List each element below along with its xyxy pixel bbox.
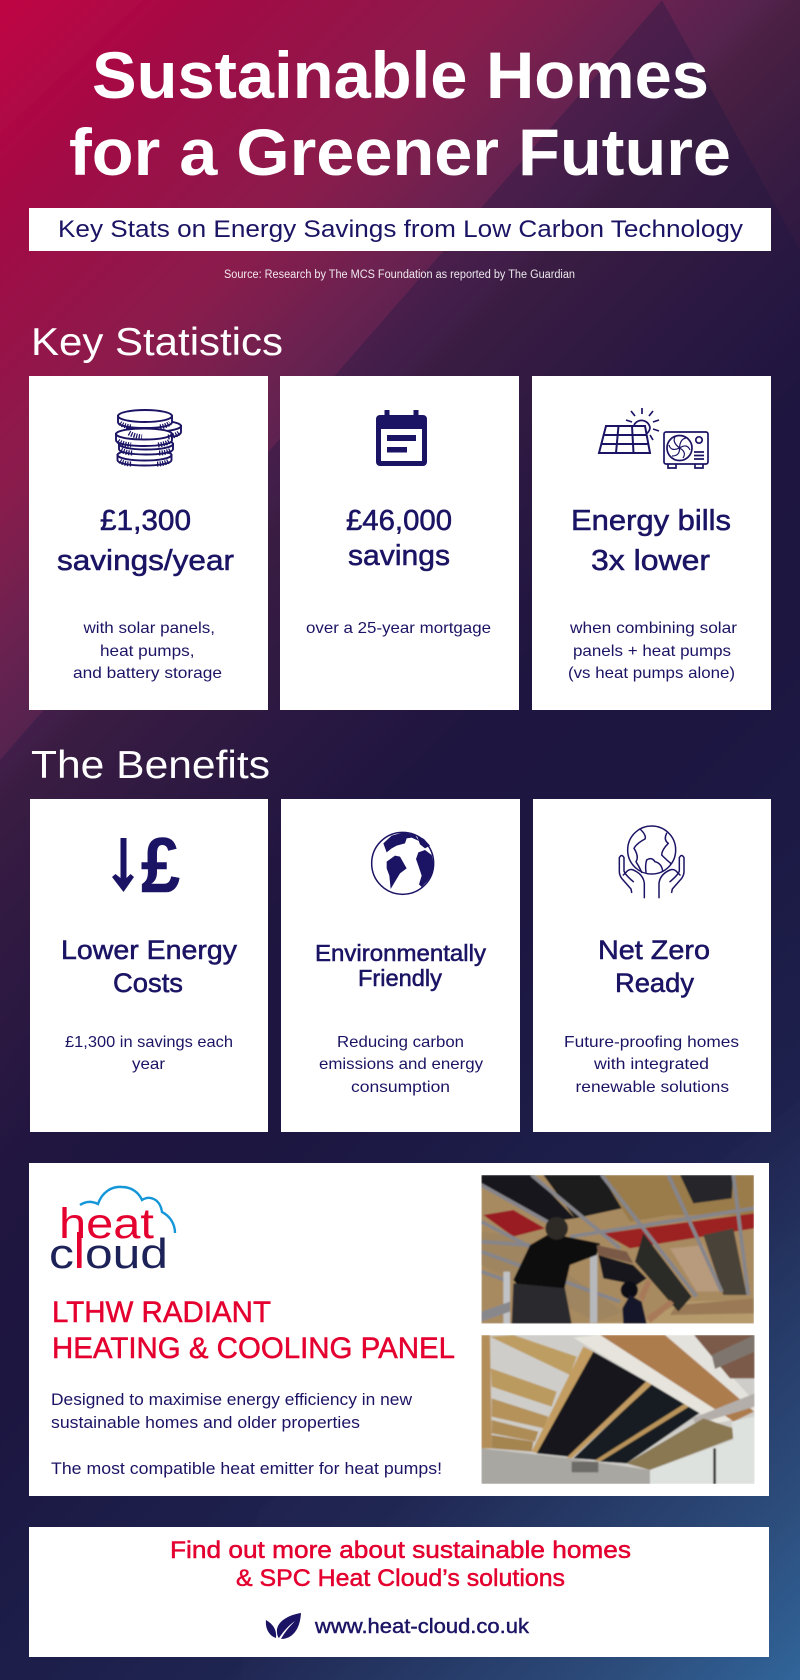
benefit title: [315, 940, 487, 991]
stat text: £46,000: [346, 505, 452, 537]
stat text: [346, 505, 452, 572]
panel: net zero ready: [533, 799, 771, 1132]
stat text: savings: [348, 540, 450, 572]
panel: call to action: [29, 1527, 769, 1657]
stat text: £1,300: [100, 505, 191, 537]
description: [564, 1034, 739, 1096]
icon: globe: [372, 832, 434, 894]
source note: Source: Research by The MCS Foundation as reported by The Guardian: [224, 269, 575, 281]
cta heading: & SPC Heat Cloud’s solutions: [236, 1565, 565, 1592]
subtitle banner: Key Stats on Energy Savings from Low Carbon Technology: [58, 216, 744, 243]
title: Sustainable Homes: [92, 38, 709, 112]
panel: energy bills: [532, 376, 771, 710]
icon: hands holding globe: [619, 826, 684, 898]
panel: mortgage savings: [280, 376, 519, 710]
icon: solar panel and heat pump: [599, 408, 708, 468]
stat text: [571, 505, 731, 577]
panel: lower energy costs: [30, 799, 268, 1132]
product description: The most compatible heat emitter for heat pumps!: [51, 1460, 442, 1478]
description: emissions and energy: [319, 1056, 483, 1073]
panel: product: [29, 1163, 769, 1496]
website url: www.heat-cloud.co.uk: [314, 1615, 530, 1638]
description: panels + heat pumps: [573, 643, 731, 660]
benefit title: Costs: [113, 968, 183, 998]
product description: Designed to maximise energy efficiency in new: [51, 1391, 412, 1409]
panel: savings per year: [29, 376, 268, 710]
description: [568, 620, 738, 682]
icon: coin stack: [116, 410, 181, 466]
description: renewable solutions: [576, 1079, 729, 1096]
description: Future-proofing homes: [564, 1034, 739, 1051]
logo: heat cloud: cloud: [49, 1230, 168, 1277]
product description: [51, 1391, 442, 1478]
description: with integrated: [593, 1056, 709, 1073]
photo: installers fitting panel: [481, 1175, 754, 1324]
description: and battery storage: [73, 665, 222, 682]
icon: calendar: [376, 410, 427, 466]
icon: down arrow and pound: £: [141, 821, 180, 909]
logo: heat cloud: [49, 1187, 175, 1277]
benefit title: Net Zero: [598, 935, 710, 965]
product heading: [52, 1296, 455, 1365]
description: consumption: [351, 1079, 450, 1096]
description: £1,300 in savings each: [65, 1034, 233, 1051]
product description: sustainable homes and older properties: [51, 1414, 360, 1432]
description: Reducing carbon: [337, 1034, 464, 1051]
description: with solar panels,: [82, 620, 215, 637]
description: over a 25-year mortgage: [306, 620, 491, 637]
benefit title: [61, 935, 238, 998]
stat text: 3x lower: [591, 545, 710, 577]
description: heat pumps,: [100, 643, 194, 660]
benefit title: Lower Energy: [61, 935, 238, 965]
cta heading: [170, 1537, 631, 1592]
description: [319, 1034, 483, 1096]
heading: key statistics: Key Statistics: [31, 321, 283, 364]
benefit title: [598, 935, 710, 998]
benefit title: Environmentally: [315, 940, 487, 966]
benefit title: Friendly: [358, 965, 443, 991]
panel: environmentally friendly: [281, 799, 520, 1132]
benefit title: Ready: [615, 968, 695, 998]
heading: the benefits: The Benefits: [31, 744, 270, 787]
description: year: [132, 1056, 166, 1073]
cta heading: Find out more about sustainable homes: [170, 1537, 631, 1564]
icon: down arrow and pound: [112, 821, 180, 909]
title: for a Greener Future: [69, 115, 731, 189]
product heading: HEATING & COOLING PANEL: [52, 1332, 455, 1365]
product heading: LTHW RADIANT: [52, 1296, 271, 1329]
description: [73, 620, 222, 682]
subtitle banner: [29, 208, 771, 251]
description: [65, 1034, 233, 1073]
photo: ceiling panels installed: [481, 1335, 755, 1484]
stat text: savings/year: [57, 545, 234, 577]
description: (vs heat pumps alone): [568, 665, 735, 682]
title: [69, 38, 731, 189]
icon: leaves: [266, 1613, 301, 1639]
description: when combining solar: [569, 620, 738, 637]
logo: heat cloud: heat: [59, 1200, 154, 1248]
stat text: [57, 505, 234, 577]
stat text: Energy bills: [571, 505, 731, 537]
